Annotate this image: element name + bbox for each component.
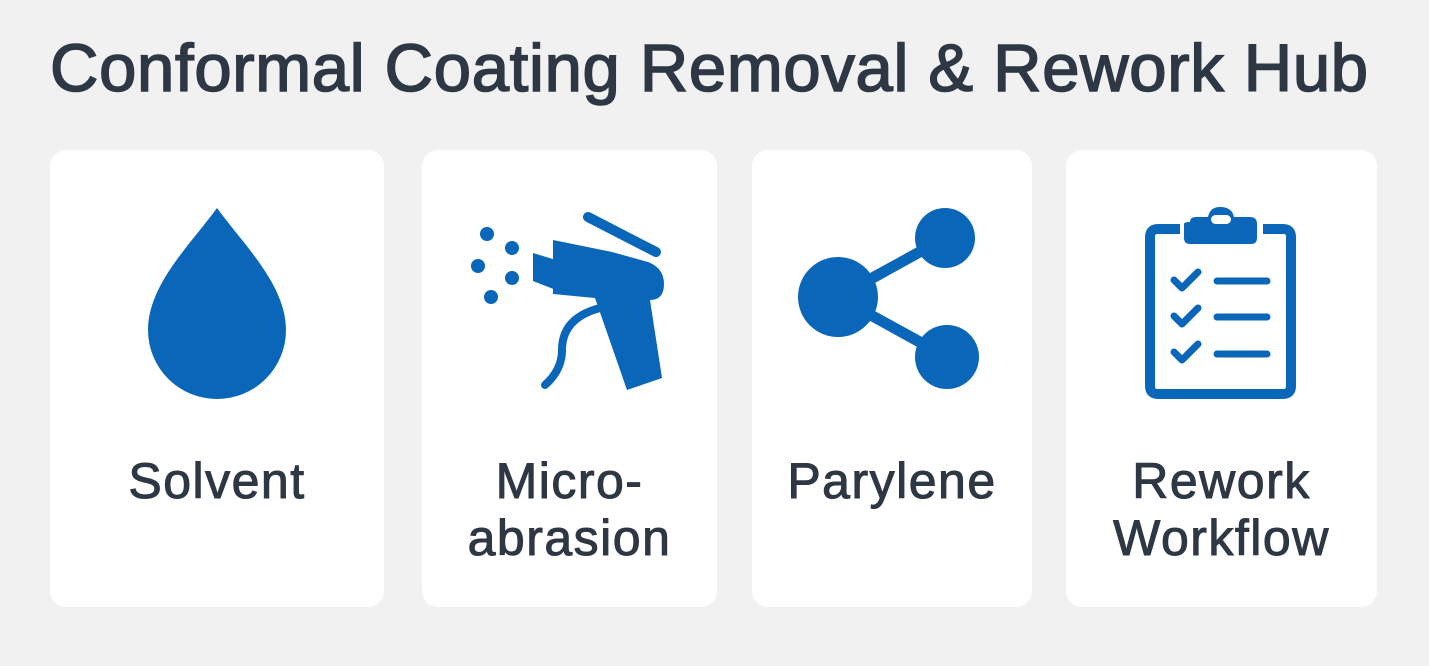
label: rework workflow	[1112, 453, 1330, 566]
label: micro-abrasion	[468, 453, 671, 566]
label: rework workflow: Rework	[1132, 453, 1311, 509]
panel: parylene	[752, 150, 1032, 607]
title: Conformal Coating Removal & Rework Hub	[50, 31, 1369, 106]
label: solvent: Solvent	[128, 453, 306, 509]
panel: solvent	[50, 150, 384, 607]
label: rework workflow: Workflow	[1113, 510, 1330, 566]
icon: clipboard	[1150, 207, 1291, 394]
icon: share nodes	[798, 208, 979, 389]
label: micro-abrasion: Micro-	[496, 453, 643, 509]
icon: water drop	[148, 208, 286, 399]
panel: rework workflow	[1066, 150, 1377, 607]
label: micro-abrasion: abrasion	[468, 510, 671, 566]
panel: micro-abrasion	[422, 150, 717, 607]
label: parylene: Parylene	[787, 453, 997, 509]
icon: spray gun	[471, 217, 664, 390]
